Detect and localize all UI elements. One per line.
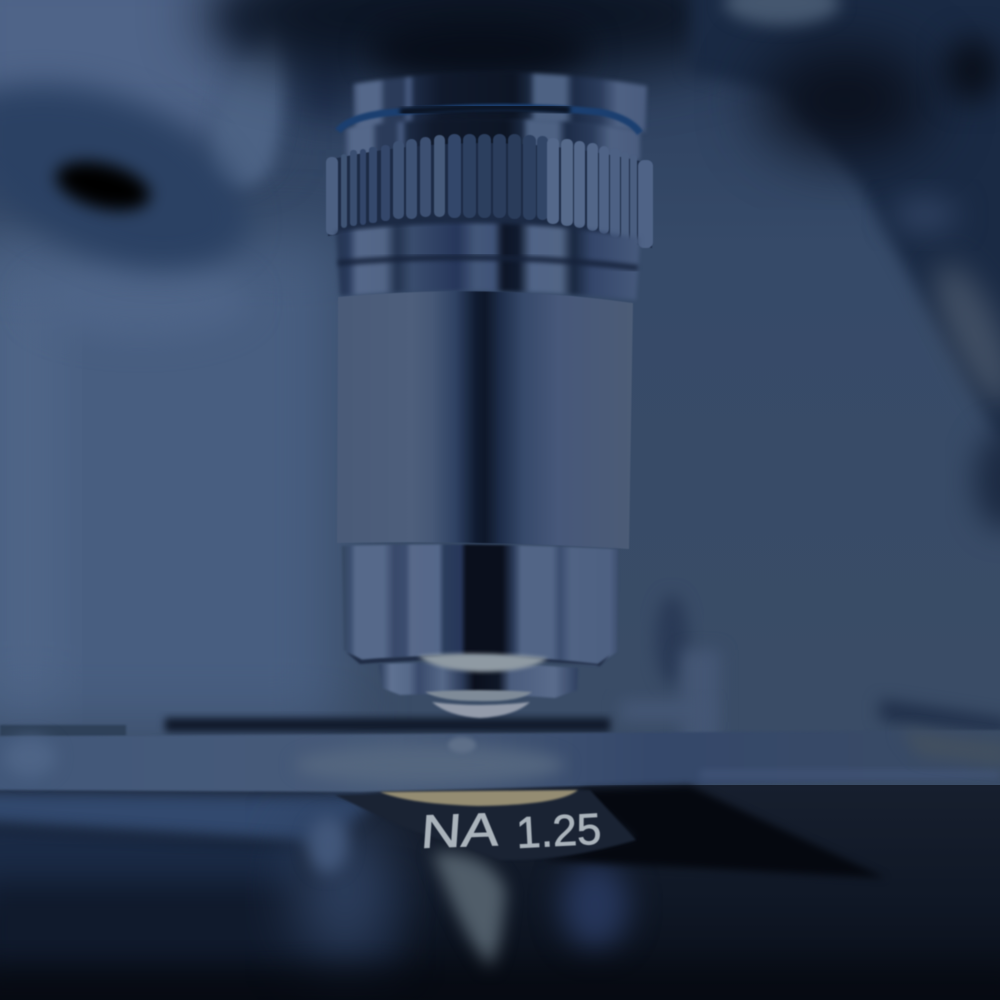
knurled collar: [326, 134, 653, 248]
engraved label: NA 1.25: NA: [419, 802, 502, 858]
objective lens: [326, 72, 653, 718]
black nosepiece wedge: [335, 790, 636, 860]
dark centre of o-ring: [400, 107, 570, 112]
lens highlight lower: [425, 690, 532, 701]
warm light under lens: [380, 790, 578, 806]
bottom bevel: [346, 652, 610, 666]
lower chrome cylinder: [342, 545, 618, 666]
icon: blurred eyepiece ring: [0, 85, 250, 269]
blue o-ring: [338, 107, 640, 133]
lens tip: [432, 702, 530, 718]
blurred microscope body: [0, 0, 1000, 730]
black shadow wedge: [540, 786, 885, 878]
main barrel: [337, 291, 633, 549]
chrome band below ring: [345, 118, 640, 165]
engraved label: NA 1.25: [419, 802, 602, 858]
glass slide: [0, 730, 1000, 792]
bottom vignette: [0, 965, 1000, 1000]
lens highlight upper: [418, 653, 548, 672]
chrome neck groove: [338, 258, 638, 268]
background: stage and dark floor: [0, 595, 1000, 1000]
front lens housing: [379, 663, 578, 698]
chrome neck: [336, 223, 640, 300]
engraved label: NA 1.25: 1.25: [515, 805, 602, 858]
top ring: [353, 72, 647, 132]
